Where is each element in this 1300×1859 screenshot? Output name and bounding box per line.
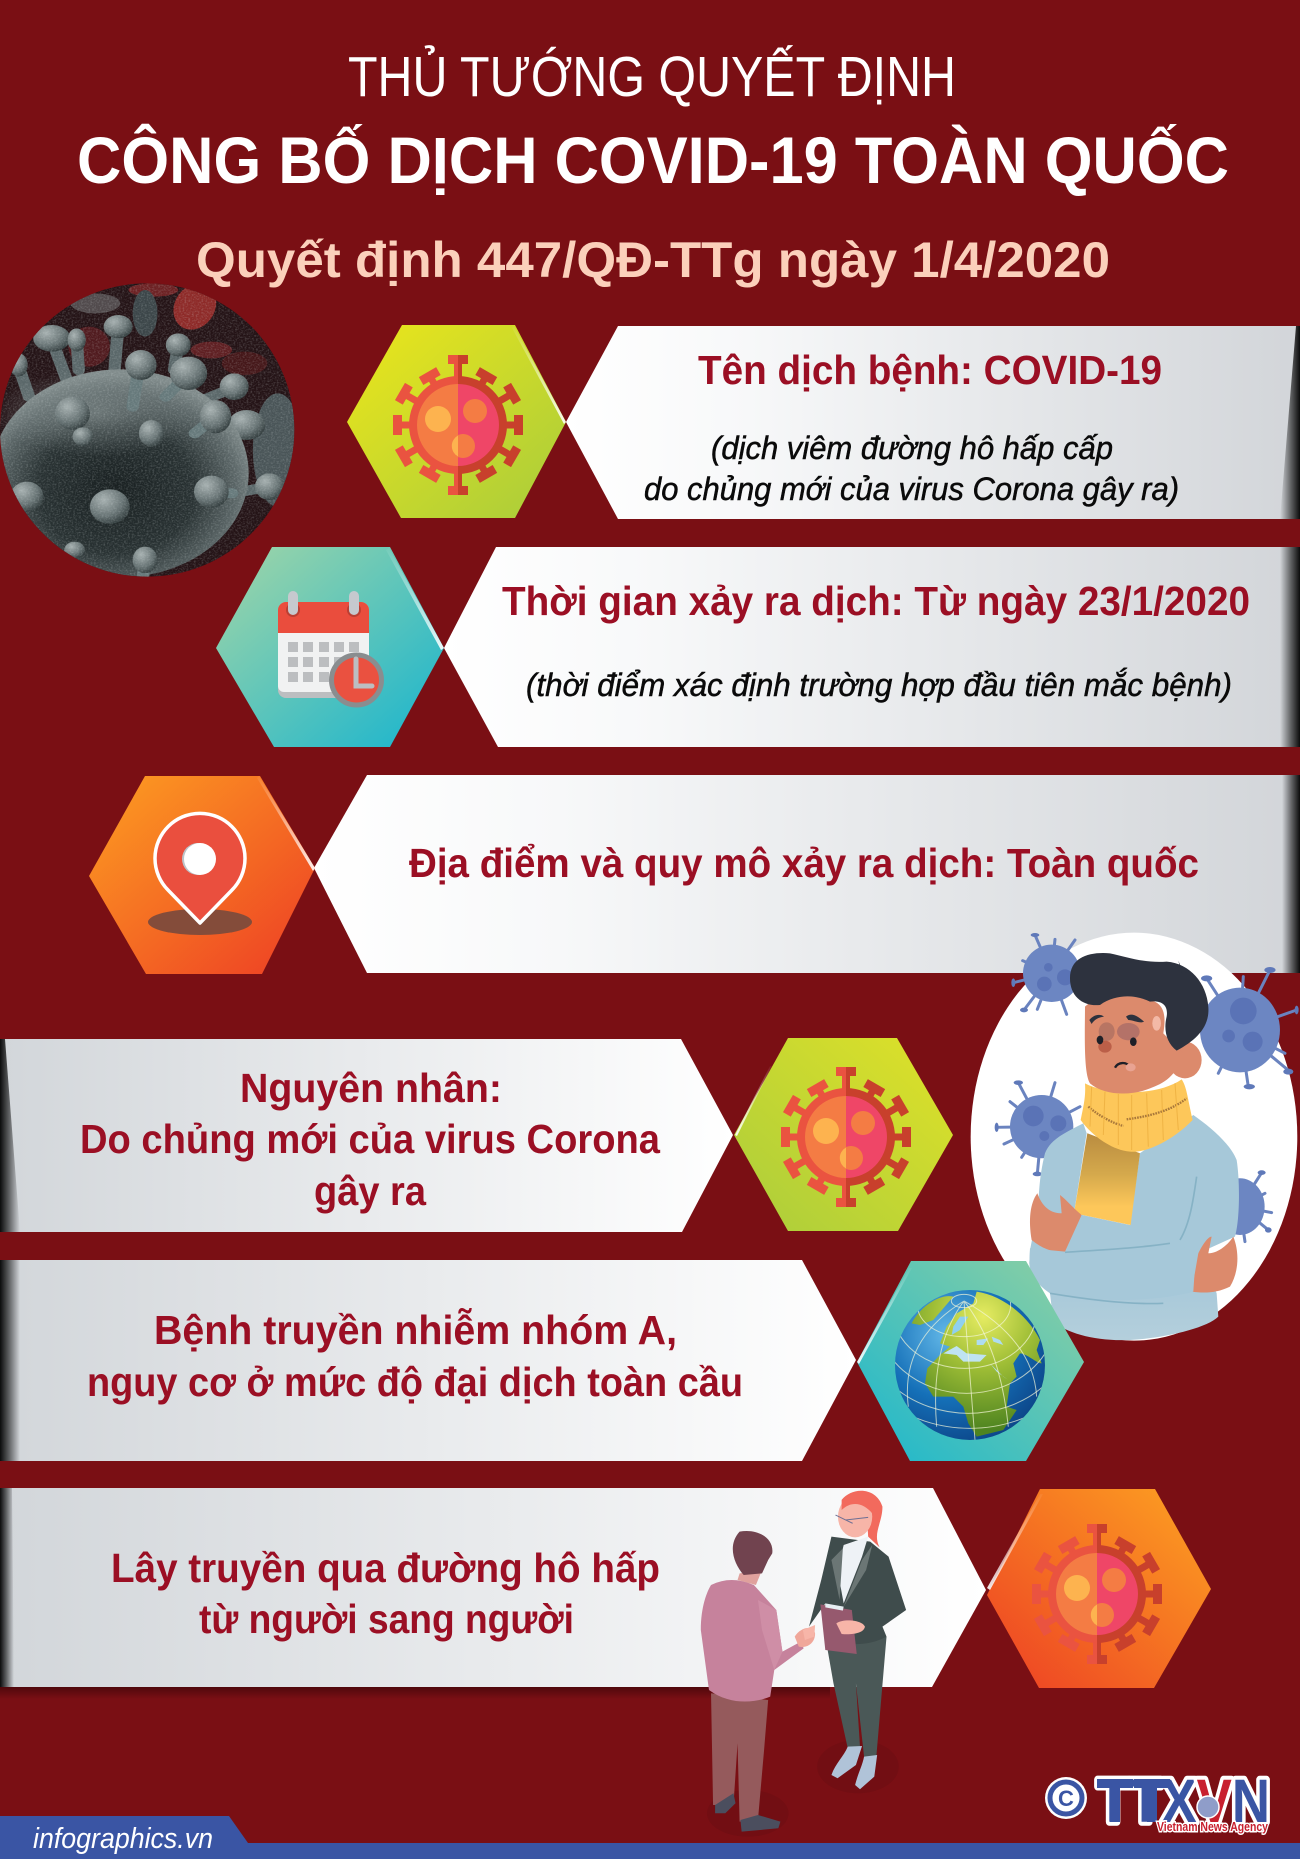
ribbon xyxy=(566,326,1300,519)
icon: globe xyxy=(895,1290,1045,1440)
panel: disease class xyxy=(0,1260,856,1461)
right curl shadow xyxy=(1280,547,1300,747)
ribbon xyxy=(0,1039,733,1232)
icon: map pin xyxy=(148,813,252,935)
hair xyxy=(1070,953,1208,1051)
heading: Thời gian xảy ra dịch: Từ ngày 23/1/2020 xyxy=(502,578,1250,624)
heading line: Nguyên nhân: xyxy=(240,1065,502,1111)
ribbon xyxy=(314,775,1300,973)
panel: time of outbreak xyxy=(444,547,1300,747)
website: infographics.vn xyxy=(33,1823,213,1855)
ribbon xyxy=(0,1260,856,1461)
illustration: two people shaking hands xyxy=(701,1491,906,1837)
blue virus particles xyxy=(995,933,1299,1242)
hexagon: globe icon teal xyxy=(857,1261,1084,1461)
body line 1: Do chủng mới của virus Corona xyxy=(80,1116,661,1162)
ear xyxy=(1168,1042,1202,1078)
heading: Tên dịch bệnh: COVID-19 xyxy=(698,347,1162,393)
small globe xyxy=(1197,1796,1219,1818)
white oval backdrop xyxy=(971,933,1297,1341)
copyright mark: C xyxy=(1058,1786,1074,1811)
panel: disease name xyxy=(566,326,1300,519)
jacket xyxy=(1029,1115,1239,1340)
shadow under ribbon xyxy=(0,1687,830,1699)
woman xyxy=(803,1491,906,1789)
sweater xyxy=(1074,1133,1140,1225)
illustration: sick man with viruses xyxy=(971,933,1299,1341)
panel: cause xyxy=(0,1039,733,1232)
ribbon xyxy=(0,1488,986,1687)
note: (thời điểm xác định trường hợp đầu tiên mắc bệnh) xyxy=(526,667,1232,703)
text line 1: Bệnh truyền nhiễm nhóm A, xyxy=(154,1307,677,1353)
sleeve creases xyxy=(1050,1177,1197,1304)
logo: TTXVN xyxy=(1045,1767,1270,1835)
photo: coronavirus micrograph xyxy=(0,280,303,577)
left curl shadow xyxy=(0,1039,20,1232)
panel: location and scale xyxy=(314,775,1300,973)
man xyxy=(701,1531,815,1832)
note line 1: (dịch viêm đường hô hấp cấp xyxy=(711,430,1113,466)
subtitle: Quyết định 447/QĐ-TTg ngày 1/4/2020 xyxy=(196,232,1110,288)
copyright mark xyxy=(1045,1777,1087,1819)
title line 1: THỦ TƯỚNG QUYẾT ĐỊNH xyxy=(348,44,956,109)
agency wordmark heavy overlay xyxy=(1097,1779,1170,1822)
hexagon: calendar icon teal xyxy=(216,547,444,747)
agency name: Vietnam News Agency xyxy=(1157,1819,1269,1834)
face xyxy=(1085,996,1183,1094)
title block xyxy=(77,44,1229,288)
hands xyxy=(1030,1193,1237,1293)
hexagon: virus icon green xyxy=(734,1038,953,1231)
icon: calendar xyxy=(278,591,382,705)
left curl shadow xyxy=(0,1488,14,1687)
crossed forearm sleeve xyxy=(1029,1215,1195,1300)
floor shadows xyxy=(707,1740,899,1837)
text line 1: Lây truyền qua đường hô hấp xyxy=(111,1545,660,1591)
facial features xyxy=(1089,1015,1161,1071)
left curl shadow xyxy=(0,1260,20,1461)
icon: clock xyxy=(332,655,382,705)
footer tab xyxy=(0,1816,248,1843)
agency wordmark: TTXVN xyxy=(1097,1767,1270,1835)
footer bar xyxy=(0,1816,1300,1859)
scarf xyxy=(1081,1079,1193,1152)
ribbon xyxy=(444,547,1300,747)
title line 2: CÔNG BỐ DỊCH COVID-19 TOÀN QUỐC xyxy=(77,123,1229,197)
hexagon: virus icon yellow xyxy=(347,325,566,518)
panel: transmission xyxy=(0,1488,986,1699)
note line 2: do chủng mới của virus Corona gây ra) xyxy=(644,471,1179,507)
text line 2: từ người sang người xyxy=(199,1596,574,1642)
hexagon: virus icon orange xyxy=(987,1489,1211,1688)
text: Địa điểm và quy mô xảy ra dịch: Toàn quốc xyxy=(409,840,1199,886)
text line 2: nguy cơ ở mức độ đại dịch toàn cầu xyxy=(87,1359,743,1405)
right curl shadow xyxy=(1280,326,1300,519)
body line 2: gây ra xyxy=(314,1168,427,1214)
right curl shadow xyxy=(1282,775,1300,973)
hexagon: map pin icon orange xyxy=(89,776,315,974)
